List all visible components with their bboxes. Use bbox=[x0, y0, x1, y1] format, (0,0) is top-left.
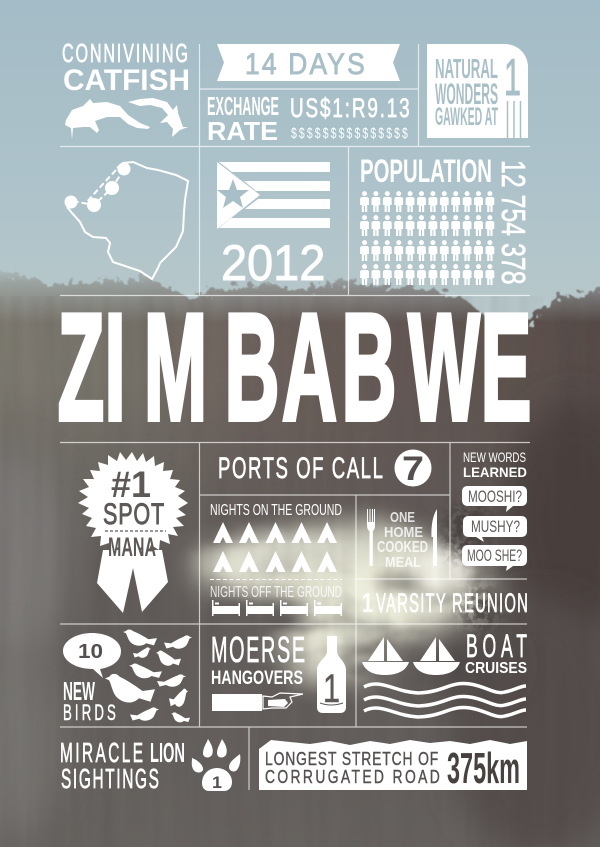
icon: knife bbox=[431, 509, 437, 566]
speech bubble: 10 bbox=[63, 633, 121, 678]
panel: natural wonders gawked at: NATURAL bbox=[435, 53, 498, 84]
panel: exchange rate: EXCHANGE bbox=[207, 91, 279, 121]
starburst bbox=[78, 452, 188, 556]
panel: one home cooked meal: HOME bbox=[384, 524, 423, 541]
ribbon bbox=[97, 550, 168, 613]
panel: new birds: 10 bbox=[78, 641, 103, 663]
panel: miracle lion sightings: MIRACLE bbox=[60, 737, 143, 768]
banner: 14 days bbox=[217, 44, 400, 81]
beds bbox=[212, 600, 342, 616]
tents row two bbox=[213, 551, 337, 572]
panel: nights on and off the ground: NIGHTS OFF THE GROUND bbox=[210, 584, 342, 601]
panel: longest stretch of corrugated road: CORRUGATED ROAD bbox=[265, 767, 440, 788]
panel: miracle lion sightings: LION bbox=[150, 737, 185, 768]
panel: connivining catfish: CATFISH bbox=[63, 64, 190, 97]
panel: miracle lion sightings: 1 bbox=[212, 773, 222, 792]
panel: natural wonders gawked at: 1 bbox=[504, 49, 521, 107]
panel: nights on and off the ground: NIGHTS ON THE GROUND bbox=[210, 502, 342, 519]
panel: natural wonders gawked at: GAWKED AT bbox=[435, 103, 498, 131]
panel: connivining catfish: CONNIVINING bbox=[62, 38, 188, 68]
panel: miracle lion sightings bbox=[60, 737, 240, 794]
panel: boat cruises: CRUISES bbox=[465, 660, 527, 677]
speech bubble: moo she: MOO SHE? bbox=[467, 547, 522, 565]
rosette: #1 spot mana: MANA bbox=[108, 532, 156, 562]
panel: new words learned bbox=[462, 449, 527, 571]
speech bubble: mooshi: MOOSHI? bbox=[468, 488, 522, 506]
icon: waves bbox=[364, 683, 526, 717]
icon: paw print bbox=[192, 739, 240, 791]
birds flock bbox=[105, 630, 192, 722]
panel: new birds: BIRDS bbox=[63, 701, 116, 725]
icon: catfish one bbox=[60, 99, 150, 140]
panel: exchange rate bbox=[207, 91, 410, 146]
icon: flag bbox=[217, 162, 330, 229]
panel: moerse hangovers bbox=[211, 631, 346, 713]
panel: exchange rate: US$1:R9.13 bbox=[290, 93, 410, 123]
panel: natural wonders gawked at: WONDERS bbox=[435, 78, 498, 111]
panel: moerse hangovers: MOERSE bbox=[211, 631, 305, 671]
title: ZIMBABWE bbox=[58, 283, 531, 452]
year: 2012: 2012 bbox=[221, 236, 325, 291]
panel: new birds bbox=[63, 630, 192, 725]
banner: 14 days: 14 DAYS bbox=[245, 46, 365, 80]
panel: longest stretch of corrugated road: LONGEST STRETCH OF bbox=[265, 749, 438, 770]
stripes bbox=[508, 101, 520, 138]
rosette: #1 spot mana: SPOT bbox=[103, 496, 164, 531]
icon: fork bbox=[367, 509, 375, 566]
panel: one home cooked meal: ONE bbox=[390, 509, 415, 526]
panel: one home cooked meal: COOKED bbox=[377, 539, 428, 556]
panel: population bbox=[360, 153, 530, 285]
rosette: #1 spot mana bbox=[78, 452, 188, 613]
panel: new words learned: NEW WORDS bbox=[463, 449, 526, 465]
panel: miracle lion sightings: SIGHTINGS bbox=[61, 763, 159, 794]
panel: longest stretch of corrugated road: 375km bbox=[447, 744, 520, 793]
panel: natural wonders gawked at bbox=[427, 44, 528, 138]
heading: ports of call bbox=[218, 450, 432, 488]
heading: ports of call: 7 bbox=[402, 450, 424, 488]
panel: exchange rate: $$$$$$$$$$$$$$$ bbox=[291, 124, 408, 141]
panel: new words learned: LEARNED bbox=[463, 464, 527, 480]
badge: 7 bbox=[394, 450, 432, 486]
icon: boat two bbox=[413, 637, 460, 675]
panel: longest stretch of corrugated road bbox=[259, 740, 527, 793]
panel: boat cruises: BOAT bbox=[466, 630, 527, 664]
pictogram: people grid bbox=[360, 191, 494, 285]
panel: one home cooked meal: MEAL bbox=[385, 554, 421, 571]
panel: 1 varsity reunion: VARSITY REUNION bbox=[376, 587, 528, 618]
icon: catfish two bbox=[128, 98, 188, 137]
panel: connivining catfish bbox=[60, 38, 190, 140]
panel: exchange rate: RATE bbox=[207, 116, 278, 146]
heading: ports of call: PORTS OF CALL bbox=[218, 452, 383, 485]
grid lines bbox=[60, 44, 530, 790]
panel: boat cruises bbox=[362, 630, 527, 717]
speech bubble: mushy: MUSHY? bbox=[471, 518, 520, 536]
icon: map of zimbabwe with route bbox=[64, 162, 188, 279]
panel: population: POPULATION bbox=[360, 153, 492, 189]
panel: new birds: NEW bbox=[63, 676, 95, 706]
rotated number: 12 754 378 bbox=[494, 160, 530, 285]
panel: 1 varsity reunion: 1 bbox=[362, 587, 373, 618]
icon: boat one bbox=[362, 637, 409, 675]
panel: one home cooked meal bbox=[367, 509, 437, 571]
panel: nights on and off the ground bbox=[210, 502, 342, 616]
dark speckled foliage bbox=[446, 500, 502, 632]
mist bbox=[195, 518, 458, 688]
panel: moerse hangovers: HANGOVERS bbox=[211, 668, 303, 689]
icon: pointing hand bbox=[212, 693, 303, 711]
icon: bottle with 1: 1 bbox=[323, 667, 340, 711]
tents row one bbox=[213, 522, 337, 543]
rosette: #1 spot mana: #1 bbox=[111, 464, 151, 505]
